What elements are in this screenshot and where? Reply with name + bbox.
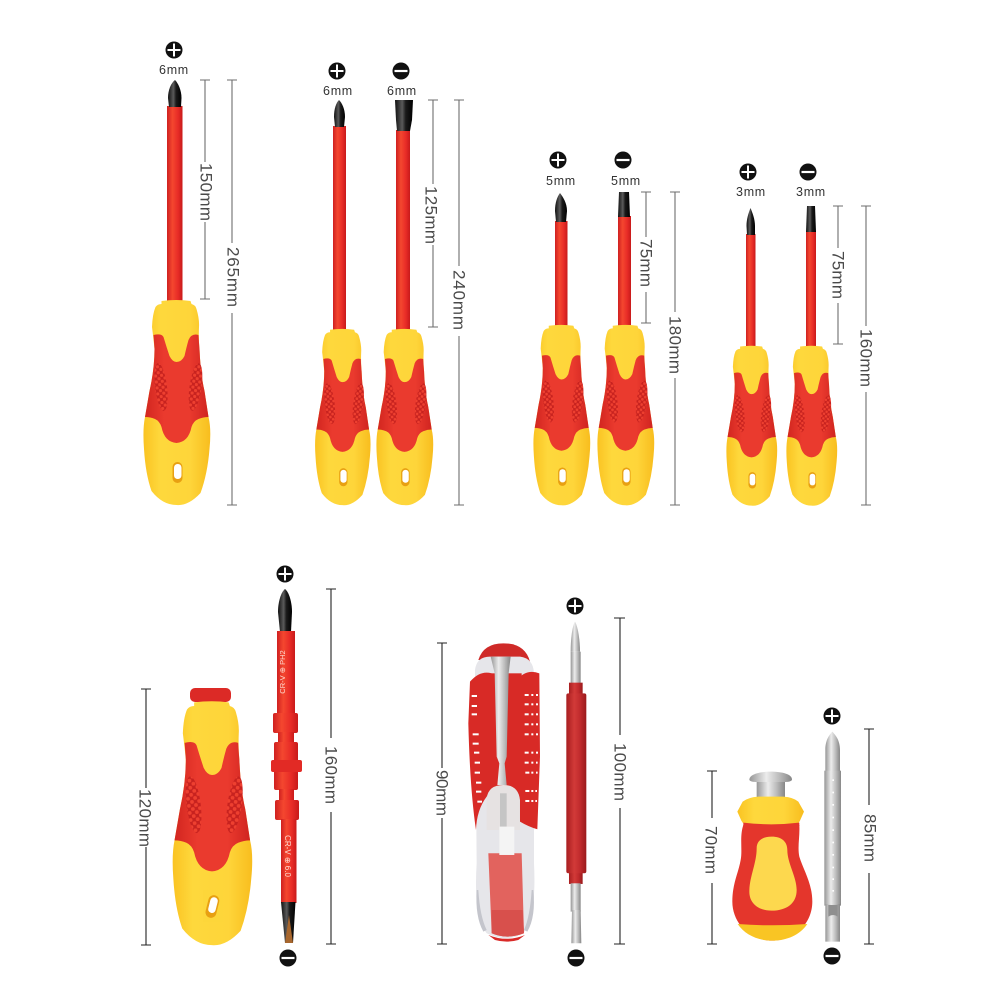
dimension: 70mm: 70mm [702,826,720,874]
bit marking: CR-V PH2: CR-V ⊕ PH2 [278,650,287,694]
dimension: 100mm: 100mm [610,743,630,801]
type icons and tip sizes: 6mm [159,63,189,77]
dimension: 125mm [422,100,440,327]
dimension: 265mm [224,80,242,505]
dimension: 265mm: 265mm [224,247,242,307]
dimension: 180mm [666,192,684,505]
screwdriver: 6mm slotted 240mm [376,100,433,505]
dimension: 160mm [322,589,340,944]
double-ended tester bit [566,622,586,943]
dimension: 160mm: 160mm [322,746,340,804]
dimension: 70mm [702,771,720,944]
stubby screwdriver [732,772,812,941]
dimension: 75mm [828,206,848,344]
dimension: 75mm: 75mm [636,239,656,287]
screwdriver: 6mm Phillips 265mm [143,80,210,505]
dimension: 150mm [196,80,216,299]
dimension: 90mm [432,643,452,944]
type icons and tip sizes: 6mm [387,84,417,98]
interchangeable handle [173,688,252,945]
screwdriver: 5mm Phillips 180mm [533,193,590,505]
stubby double-ended bit [824,732,841,942]
dimension: 90mm: 90mm [432,770,452,816]
dimension: 120mm: 120mm [136,789,154,847]
clear tester handle [468,643,540,942]
type icons and tip sizes: 5mm [546,174,576,188]
double-ended insulated bit [271,589,302,943]
dimension: 240mm [450,100,468,505]
dimension: 75mm [636,192,656,323]
dimension: 180mm: 180mm [666,316,684,374]
screwdriver: 3mm Phillips 160mm [726,208,777,506]
dimension: 85mm [860,729,880,944]
dimension: 85mm: 85mm [860,814,880,862]
dimension: 160mm: 160mm [856,329,876,387]
dimension: 150mm: 150mm [196,163,216,221]
type icons and tip sizes [159,42,840,966]
dimension: 100mm [610,618,630,944]
type icons and tip sizes: 3mm [736,185,766,199]
screwdriver: 3mm slotted 160mm [786,206,837,506]
screwdriver: 6mm Phillips 240mm [315,100,371,505]
screwdriver: 5mm slotted 180mm [597,192,654,505]
dimension: 125mm: 125mm [422,186,440,244]
bit marking: CR-V 6.0: CR-V ⊕ 6.0 [283,835,292,877]
dimension: 120mm [136,689,154,945]
dimension: 160mm [856,206,876,505]
dimension: 75mm: 75mm [828,251,848,299]
type icons and tip sizes: 3mm [796,185,826,199]
type icons and tip sizes: 5mm [611,174,641,188]
dimension: 240mm: 240mm [450,270,468,330]
type icons and tip sizes: 6mm [323,84,353,98]
